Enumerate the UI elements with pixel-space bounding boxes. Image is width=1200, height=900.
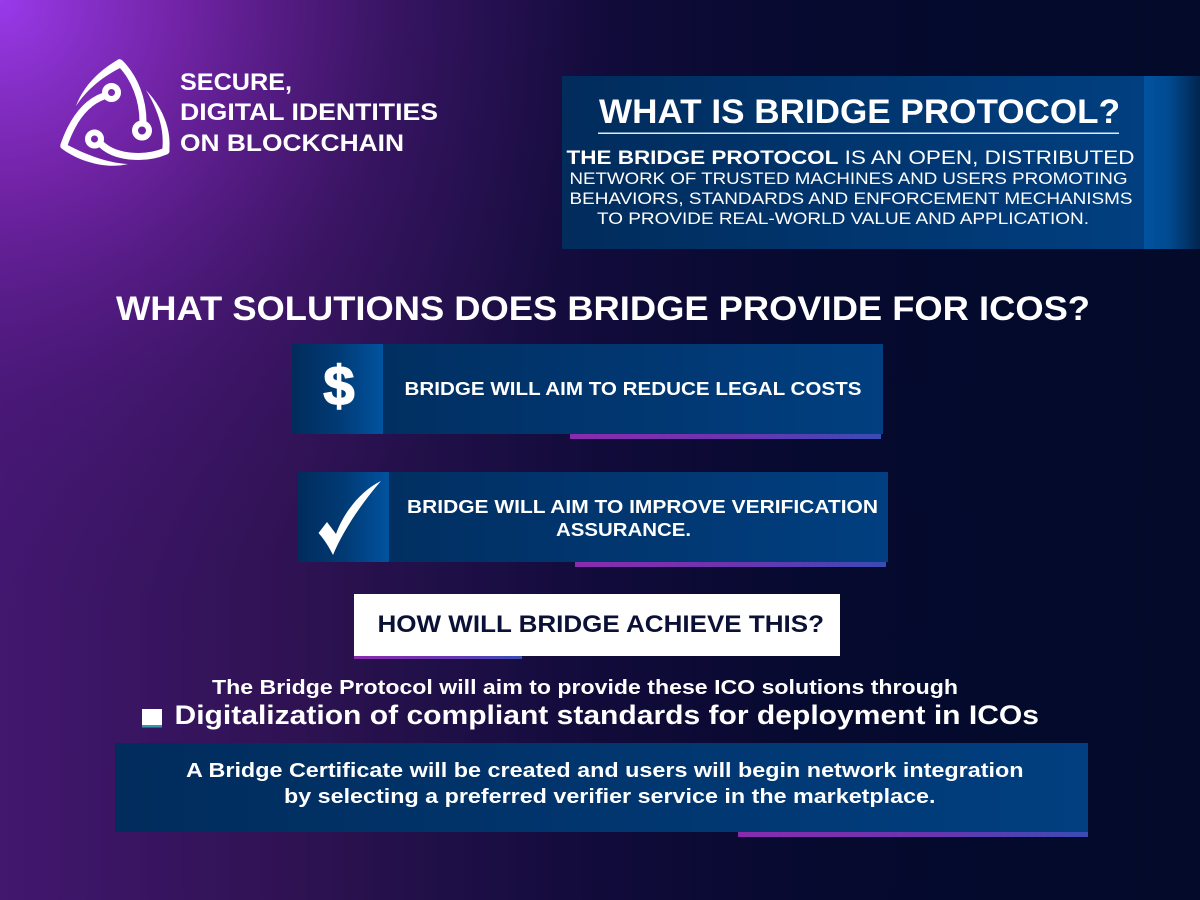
label: improve verification assurance: BRIDGE WILL AIM TO IMPROVE VERIFICATION <box>407 496 878 517</box>
tagline <box>180 69 438 157</box>
panel: reduce legal costs <box>292 344 883 439</box>
icon: square bullet <box>142 709 162 728</box>
icon: dollar sign: $ <box>323 354 355 417</box>
callout: how will Bridge achieve this: HOW WILL BRIDGE ACHIEVE THIS? <box>378 611 824 638</box>
label: improve verification assurance: ASSURANCE. <box>556 519 691 540</box>
tagline: DIGITAL IDENTITIES <box>180 99 438 126</box>
text block: protocol description: NETWORK OF TRUSTED MACHINES AND USERS PROMOTING <box>570 169 1128 188</box>
panel: Bridge Certificate <box>115 743 1088 837</box>
text block: Bridge Certificate description: A Bridge Certificate will be created and users will begin network integration <box>186 760 1024 782</box>
heading: what is Bridge Protocol: WHAT IS BRIDGE PROTOCOL? <box>599 93 1120 131</box>
text block: Bridge Certificate description: by selecting a preferred verifier service in the marketplace. <box>284 786 936 808</box>
icon: Bridge circuit emblem <box>60 59 170 166</box>
callout: how will Bridge achieve this <box>354 594 840 659</box>
text block: protocol description: THE BRIDGE PROTOCOL IS AN OPEN, DISTRIBUTED <box>566 148 1134 169</box>
text block: protocol description: TO PROVIDE REAL-WORLD VALUE AND APPLICATION. <box>597 209 1089 228</box>
label: improve verification assurance <box>407 496 878 540</box>
text block: ICO solutions intro: The Bridge Protocol will aim to provide these ICO solutions through <box>212 677 958 699</box>
tagline: ON BLOCKCHAIN <box>180 130 404 157</box>
text block: protocol description <box>566 148 1134 228</box>
icon: check mark <box>318 481 381 555</box>
panel: what is Bridge Protocol <box>562 76 1200 249</box>
heading: solutions for ICOs: WHAT SOLUTIONS DOES BRIDGE PROVIDE FOR ICOS? <box>116 290 1090 328</box>
label: reduce legal costs: BRIDGE WILL AIM TO REDUCE LEGAL COSTS <box>404 378 862 399</box>
text block: protocol description: BEHAVIORS, STANDARDS AND ENFORCEMENT MECHANISMS <box>570 189 1132 208</box>
bullet: digitalization of compliant standards: Digitalization of compliant standards for deployment in ICOs <box>174 700 1039 730</box>
logo: Bridge emblem and tagline <box>60 59 438 166</box>
tagline: SECURE, <box>180 69 292 96</box>
text block: Bridge Certificate description <box>186 760 1024 808</box>
panel: improve verification assurance <box>298 472 888 567</box>
